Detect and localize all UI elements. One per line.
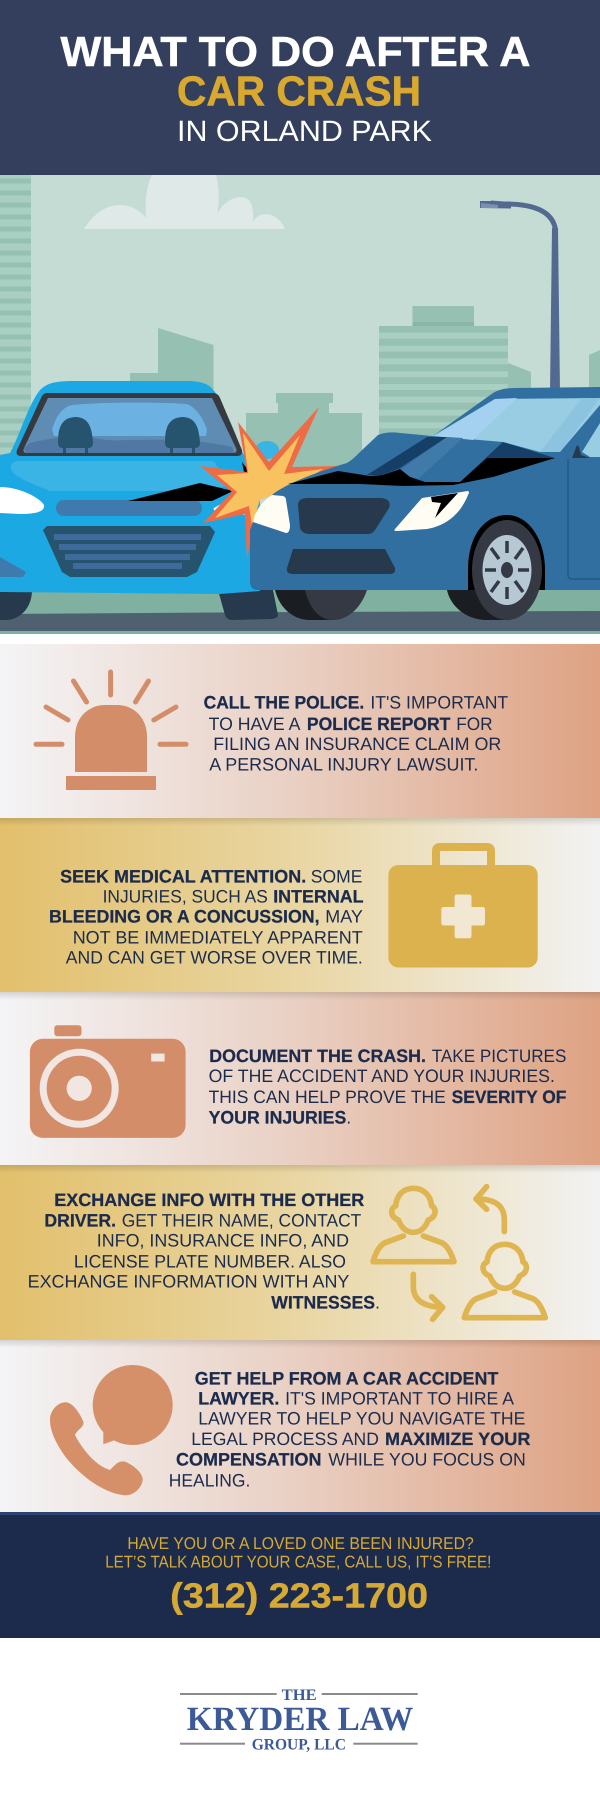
- text: seek medical attention: INJURIES, SUCH AS: [103, 887, 268, 907]
- text: get legal help: LAWYER TO HELP YOU NAVIGATE THE: [198, 1408, 525, 1428]
- text: call the police: FILING AN INSURANCE CLAIM OR: [213, 734, 501, 754]
- text: call the police: A PERSONAL INJURY LAWSUIT.: [209, 754, 478, 774]
- text: exchange info: [28, 1190, 380, 1312]
- text: call the police: IT'S IMPORTANT: [370, 692, 508, 712]
- text: seek medical attention: SOME: [311, 866, 362, 886]
- icon: camera: [30, 1025, 186, 1138]
- text: call the police: FOR: [456, 714, 493, 734]
- seats: [58, 417, 200, 453]
- title: IN ORLAND PARK: [177, 115, 432, 148]
- street lamp: [480, 200, 560, 392]
- call to action text: [105, 1534, 491, 1572]
- text: document the crash: SEVERITY OF: [452, 1087, 566, 1107]
- text: seek medical attention: MAY: [325, 907, 363, 927]
- text: seek medical attention: INTERNAL: [273, 887, 364, 907]
- skyline buildings: [0, 175, 600, 480]
- text: call the police: [204, 692, 508, 774]
- text: document the crash: OF THE ACCIDENT AND YOUR INJURIES.: [209, 1066, 555, 1086]
- icon: two people exchanging information: [373, 1187, 545, 1319]
- text: seek medical attention: SEEK MEDICAL ATTENTION.: [60, 866, 306, 886]
- text: exchange info: LICENSE PLATE NUMBER. ALSO: [74, 1251, 346, 1271]
- text: get legal help: HEALING.: [169, 1470, 250, 1490]
- step 3 panel: document the crash: [0, 992, 600, 1165]
- text: exchange info: EXCHANGE INFORMATION WITH ANY: [28, 1271, 349, 1291]
- step 2 panel: seek medical attention: [0, 818, 600, 992]
- text: get legal help: LAWYER.: [198, 1388, 279, 1408]
- text: get legal help: MAXIMIZE YOUR: [385, 1429, 530, 1449]
- text: seek medical attention: AND CAN GET WORSE OVER TIME.: [66, 947, 363, 967]
- icon: siren: [36, 672, 186, 790]
- text: seek medical attention: NOT BE IMMEDIATELY APPARENT: [73, 927, 363, 947]
- call to action text: HAVE YOU OR A LOVED ONE BEEN INJURED?: [127, 1534, 474, 1553]
- text: document the crash: TAKE PICTURES: [432, 1046, 566, 1066]
- logo: THE: [282, 1687, 317, 1704]
- logo: [180, 1687, 418, 1754]
- text: exchange info: DRIVER.: [44, 1210, 116, 1230]
- title: CAR CRASH: [177, 68, 421, 114]
- text: exchange info: .: [375, 1292, 380, 1312]
- text: get legal help: [169, 1369, 530, 1490]
- logo: KRYDER LAW: [187, 1701, 413, 1738]
- text: get legal help: GET HELP FROM A CAR ACCIDENT: [195, 1369, 498, 1389]
- text: call the police: POLICE REPORT: [307, 714, 450, 734]
- icon: first aid kit: [388, 847, 538, 968]
- text: document the crash: [209, 1046, 566, 1128]
- phone number: (312) 223-1700: [170, 1576, 428, 1616]
- step 1 panel: call the police: [0, 644, 600, 818]
- header banner: [0, 0, 600, 175]
- left blue car: [0, 381, 279, 620]
- text: exchange info: WITNESSES: [271, 1292, 375, 1312]
- logo: GROUP, LLC: [252, 1736, 346, 1754]
- text: document the crash: THIS CAN HELP PROVE THE: [209, 1087, 446, 1107]
- person one: [373, 1188, 454, 1262]
- title: [60, 28, 530, 148]
- text: exchange info: INFO, INSURANCE INFO, AND: [97, 1231, 349, 1251]
- text: call the police: TO HAVE A: [209, 714, 300, 734]
- text: get legal help: COMPENSATION: [176, 1450, 322, 1470]
- text: exchange info: EXCHANGE INFO WITH THE OTHER: [54, 1190, 364, 1210]
- step 5 panel: get legal help: [0, 1340, 600, 1512]
- text: get legal help: IT'S IMPORTANT TO HIRE A: [285, 1388, 514, 1408]
- step 4 panel: exchange info: [0, 1165, 600, 1340]
- ground and road: [0, 590, 600, 634]
- text: call the police: CALL THE POLICE.: [204, 692, 364, 712]
- call to action text: LET’S TALK ABOUT YOUR CASE, CALL US, IT’S FREE!: [105, 1553, 491, 1572]
- text: seek medical attention: [49, 866, 364, 967]
- text: seek medical attention: BLEEDING OR A CONCUSSION,: [49, 907, 320, 927]
- arrow: down and right: [413, 1274, 443, 1319]
- icon: phone and speech bubble: [50, 1365, 173, 1495]
- text: document the crash: YOUR INJURIES: [209, 1108, 346, 1128]
- crash scene illustration: [0, 175, 600, 634]
- text: document the crash: DOCUMENT THE CRASH.: [209, 1046, 426, 1066]
- text: get legal help: WHILE YOU FOCUS ON: [328, 1450, 526, 1470]
- cloud: [84, 175, 285, 229]
- text: exchange info: GET THEIR NAME, CONTACT: [122, 1210, 361, 1230]
- text: document the crash: .: [346, 1108, 351, 1128]
- text: get legal help: LEGAL PROCESS AND: [191, 1429, 379, 1449]
- front wheel: [468, 515, 545, 620]
- title: WHAT TO DO AFTER A: [60, 28, 530, 75]
- call to action banner: [0, 1512, 600, 1638]
- arrow: up and left: [476, 1187, 504, 1232]
- person two: [464, 1244, 545, 1318]
- impact burst: [200, 407, 337, 560]
- right dark blue car: [250, 387, 600, 620]
